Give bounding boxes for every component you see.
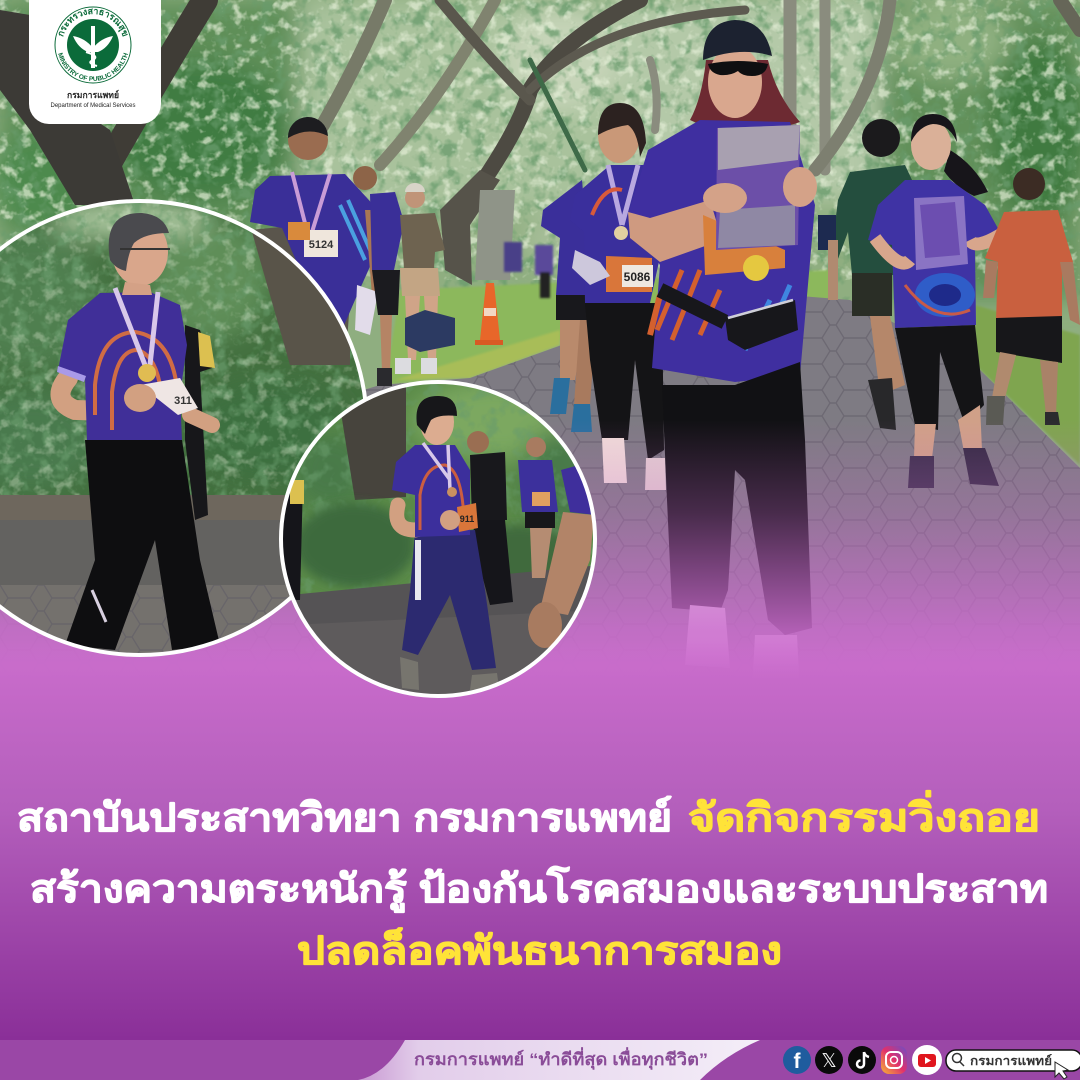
head bbox=[421, 416, 454, 445]
arms bbox=[389, 498, 420, 538]
main runner: woman in cap holding packet bbox=[628, 20, 817, 695]
bib bbox=[703, 215, 785, 275]
runner: man behind bbox=[353, 166, 404, 386]
icon: X bbox=[815, 1046, 843, 1074]
footer ribbon with slogan bbox=[358, 1040, 760, 1080]
path bbox=[0, 296, 1080, 760]
logo: Ministry of Public Health seal: กระทรวงสาธารณสุข bbox=[58, 8, 128, 37]
icon: Facebook bbox=[783, 1046, 811, 1074]
headline line 3: ปลดล็อคพันธนาการสมอง bbox=[297, 927, 782, 973]
purple gradient fade over the photo bbox=[0, 420, 1080, 840]
trousers bbox=[65, 440, 220, 650]
packet bbox=[716, 125, 800, 250]
tree canopy bbox=[0, 0, 1080, 300]
arms bbox=[50, 372, 86, 420]
head bbox=[114, 233, 168, 285]
headline line 1: white part: สถาบันประสาทวิทยา กรมการแพทย์ bbox=[17, 795, 672, 840]
traffic cone bbox=[475, 283, 503, 345]
shirt bbox=[628, 120, 815, 382]
icon: YouTube bbox=[912, 1045, 942, 1075]
footer band bbox=[0, 1036, 1080, 1080]
logo: Ministry of Public Health seal: MINISTRY OF PUBLIC HEALTH bbox=[58, 52, 128, 81]
sunglasses bbox=[708, 61, 768, 76]
icon: Facebook: f bbox=[794, 1050, 802, 1073]
runner: man with bib 5124 bbox=[250, 117, 386, 335]
trunk bbox=[250, 225, 350, 365]
hair bbox=[690, 60, 800, 127]
logo card bbox=[29, 0, 161, 124]
logo text: English department name: Department of Medical Services bbox=[50, 103, 136, 109]
icon: cursor bbox=[1055, 1062, 1068, 1079]
runner: man in blue shoes bbox=[541, 180, 596, 432]
runner: woman on right with packet bbox=[868, 114, 1000, 488]
tree trunks and branches bbox=[105, 0, 1080, 200]
bushes bbox=[301, 500, 558, 590]
bystander bbox=[185, 325, 212, 520]
circular photo: walking man with gold medal bbox=[0, 200, 370, 665]
medal ribbon bbox=[115, 288, 158, 365]
ground bbox=[308, 611, 575, 694]
grass bbox=[385, 270, 1080, 465]
runner: man with bib 5124: 5124 bbox=[309, 239, 334, 251]
headline line 1: yellow part: จัดกิจกรรมวิ่งถอย bbox=[688, 790, 1040, 840]
background photo: park path with runners bbox=[0, 0, 1080, 760]
headline bbox=[17, 790, 1048, 973]
search box: กรมการแพทย์ bbox=[970, 1054, 1052, 1068]
bib bbox=[457, 503, 478, 532]
headline line 2: สร้างความตระหนักรู้ ป้องกันโรคสมองและระบบประสาท bbox=[30, 866, 1048, 913]
main runner: trousers bbox=[402, 530, 496, 670]
runner: woman with bib 5086: 5086 bbox=[624, 270, 651, 284]
icon: TikTok bbox=[848, 1046, 876, 1074]
shirt bbox=[392, 445, 470, 537]
security man bbox=[467, 431, 489, 453]
ground bbox=[0, 495, 286, 520]
gradient panel behind the headline bbox=[0, 640, 1080, 1040]
logo text: Thai department name: กรมการแพทย์ bbox=[67, 89, 119, 100]
circular photo: smiling runner bbox=[280, 380, 600, 700]
runner: man in green shirt bbox=[818, 119, 912, 430]
runner: woman with bib 5086 bbox=[570, 103, 668, 490]
shirt bbox=[58, 292, 187, 440]
trousers bbox=[662, 362, 812, 635]
runner: man in red shirt bbox=[983, 168, 1080, 425]
person at left edge bbox=[283, 493, 302, 600]
near arm at right edge bbox=[561, 466, 591, 514]
runner: woman in brown top bbox=[395, 183, 455, 374]
search box bbox=[946, 1050, 1080, 1079]
distant runners bbox=[504, 242, 553, 298]
belt bag bbox=[660, 290, 725, 322]
shoes bbox=[685, 605, 730, 668]
icon: X: 𝕏 bbox=[821, 1051, 837, 1072]
logo: Ministry of Public Health seal bbox=[54, 6, 132, 84]
icon: Instagram bbox=[881, 1046, 907, 1074]
third man bbox=[526, 437, 546, 457]
bib in hand bbox=[140, 378, 198, 415]
circular photo: walking man with gold medal: 311 bbox=[174, 395, 192, 407]
footer ribbon with slogan: กรมการแพทย์ “ทำดีที่สุด เพื่อทุกชีวิต” bbox=[414, 1047, 708, 1070]
cap bbox=[703, 20, 772, 60]
shoes bbox=[400, 657, 419, 690]
trunk bbox=[337, 385, 406, 500]
circular photo: smiling runner: 911 bbox=[460, 514, 474, 524]
